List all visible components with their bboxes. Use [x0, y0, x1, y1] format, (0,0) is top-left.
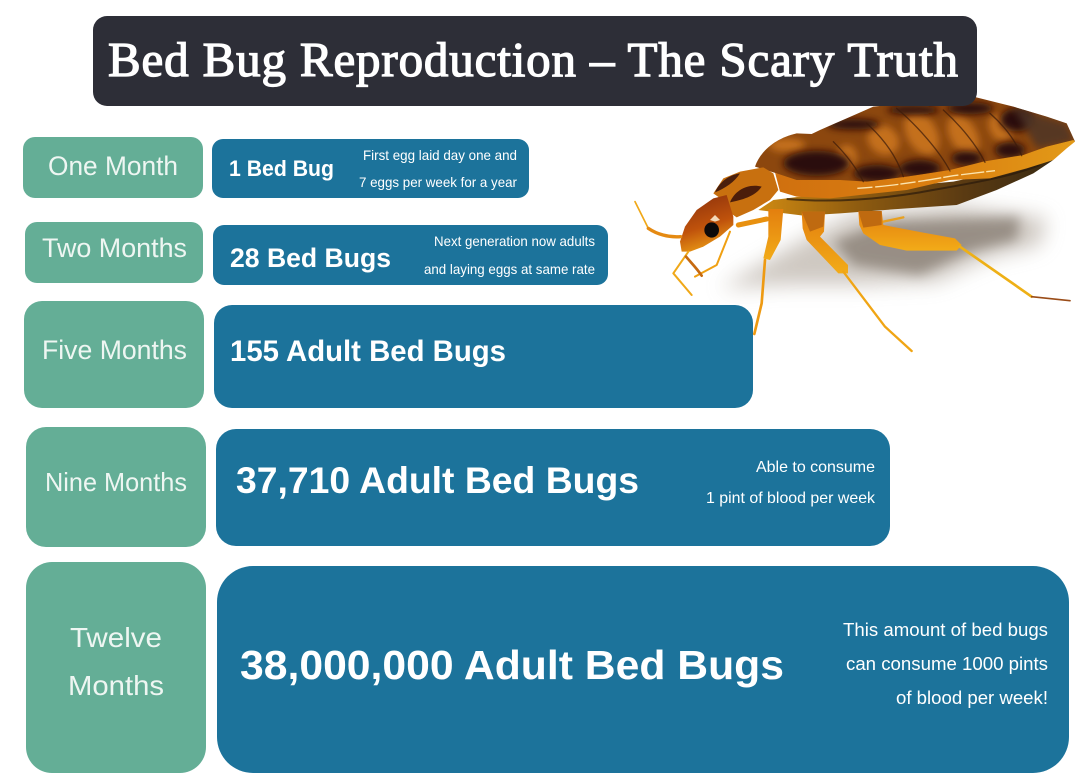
hind leg: [858, 211, 1070, 301]
antennae and mouthparts: [635, 202, 702, 295]
label: two months: Two Months: [42, 233, 187, 263]
panel: 1 bed bug: 1 Bed Bug: [229, 156, 334, 181]
label: one month: One Month: [48, 151, 178, 181]
thorax: [713, 167, 778, 217]
panel: 1 bed bug: First egg laid day one and: [363, 147, 517, 163]
illustration: bed bug: [635, 95, 1080, 351]
panel: 37,710 adult bed bugs: Able to consume: [756, 459, 875, 476]
shell glare: [857, 171, 995, 188]
row: twelve months: [26, 562, 1069, 773]
shell highlights: [768, 106, 1016, 168]
panel: 155 adult bed bugs: [214, 305, 753, 408]
far legs: [695, 217, 903, 277]
panel: 38,000,000 adult bed bugs: can consume 1000 pints: [846, 653, 1048, 674]
belly seam: [787, 165, 1040, 200]
label: two months: [25, 222, 203, 283]
label: one month: [23, 137, 203, 198]
shell segment ribs: [833, 108, 1022, 182]
panel: 37,710 adult bed bugs: [216, 429, 890, 546]
underbelly: [758, 160, 1053, 216]
front leg: [754, 209, 783, 334]
middle leg: [802, 212, 912, 351]
panel: 28 bed bugs: and laying eggs at same rate: [424, 261, 595, 277]
label: twelve months: Twelve: [70, 622, 162, 653]
label: twelve months: Months: [68, 670, 164, 701]
panel: 38,000,000 adult bed bugs: of blood per week!: [896, 687, 1048, 708]
bug shadow: [720, 205, 1047, 288]
panel: 155 adult bed bugs: 155 Adult Bed Bugs: [230, 335, 506, 368]
head: [680, 195, 733, 252]
label: twelve months: [26, 562, 206, 773]
panel: 28 bed bugs: 28 Bed Bugs: [230, 243, 391, 273]
title: Bed Bug Reproduction – The Scary Truth: [108, 32, 958, 87]
label: five months: [24, 301, 204, 408]
head glint: [710, 215, 720, 222]
shell rim: [775, 138, 1075, 198]
title banner: [93, 16, 977, 106]
shell top: [753, 95, 1080, 185]
panel: 28 bed bugs: [213, 225, 608, 285]
shell dark patches: [783, 102, 1033, 182]
label: five months: Five Months: [42, 335, 187, 365]
panel: 1 bed bug: [212, 139, 529, 198]
panel: 38,000,000 adult bed bugs: This amount of bed bugs: [843, 619, 1048, 640]
panel: 37,710 adult bed bugs: 37,710 Adult Bed Bugs: [236, 460, 639, 501]
panel: 28 bed bugs: Next generation now adults: [434, 233, 595, 249]
row: one month: [23, 137, 529, 198]
panel: 37,710 adult bed bugs: 1 pint of blood per week: [706, 490, 876, 507]
row: five months: [24, 301, 753, 408]
row: nine months: [26, 427, 890, 547]
label: nine months: [26, 427, 206, 547]
shell tail: [1013, 107, 1075, 148]
panel: 38,000,000 adult bed bugs: 38,000,000 Adult Bed Bugs: [240, 642, 784, 688]
eye: [704, 222, 719, 238]
label: nine months: Nine Months: [45, 467, 187, 497]
panel: 38,000,000 adult bed bugs: [217, 566, 1069, 773]
row: two months: [25, 222, 608, 285]
panel: 1 bed bug: 7 eggs per week for a year: [359, 174, 517, 190]
